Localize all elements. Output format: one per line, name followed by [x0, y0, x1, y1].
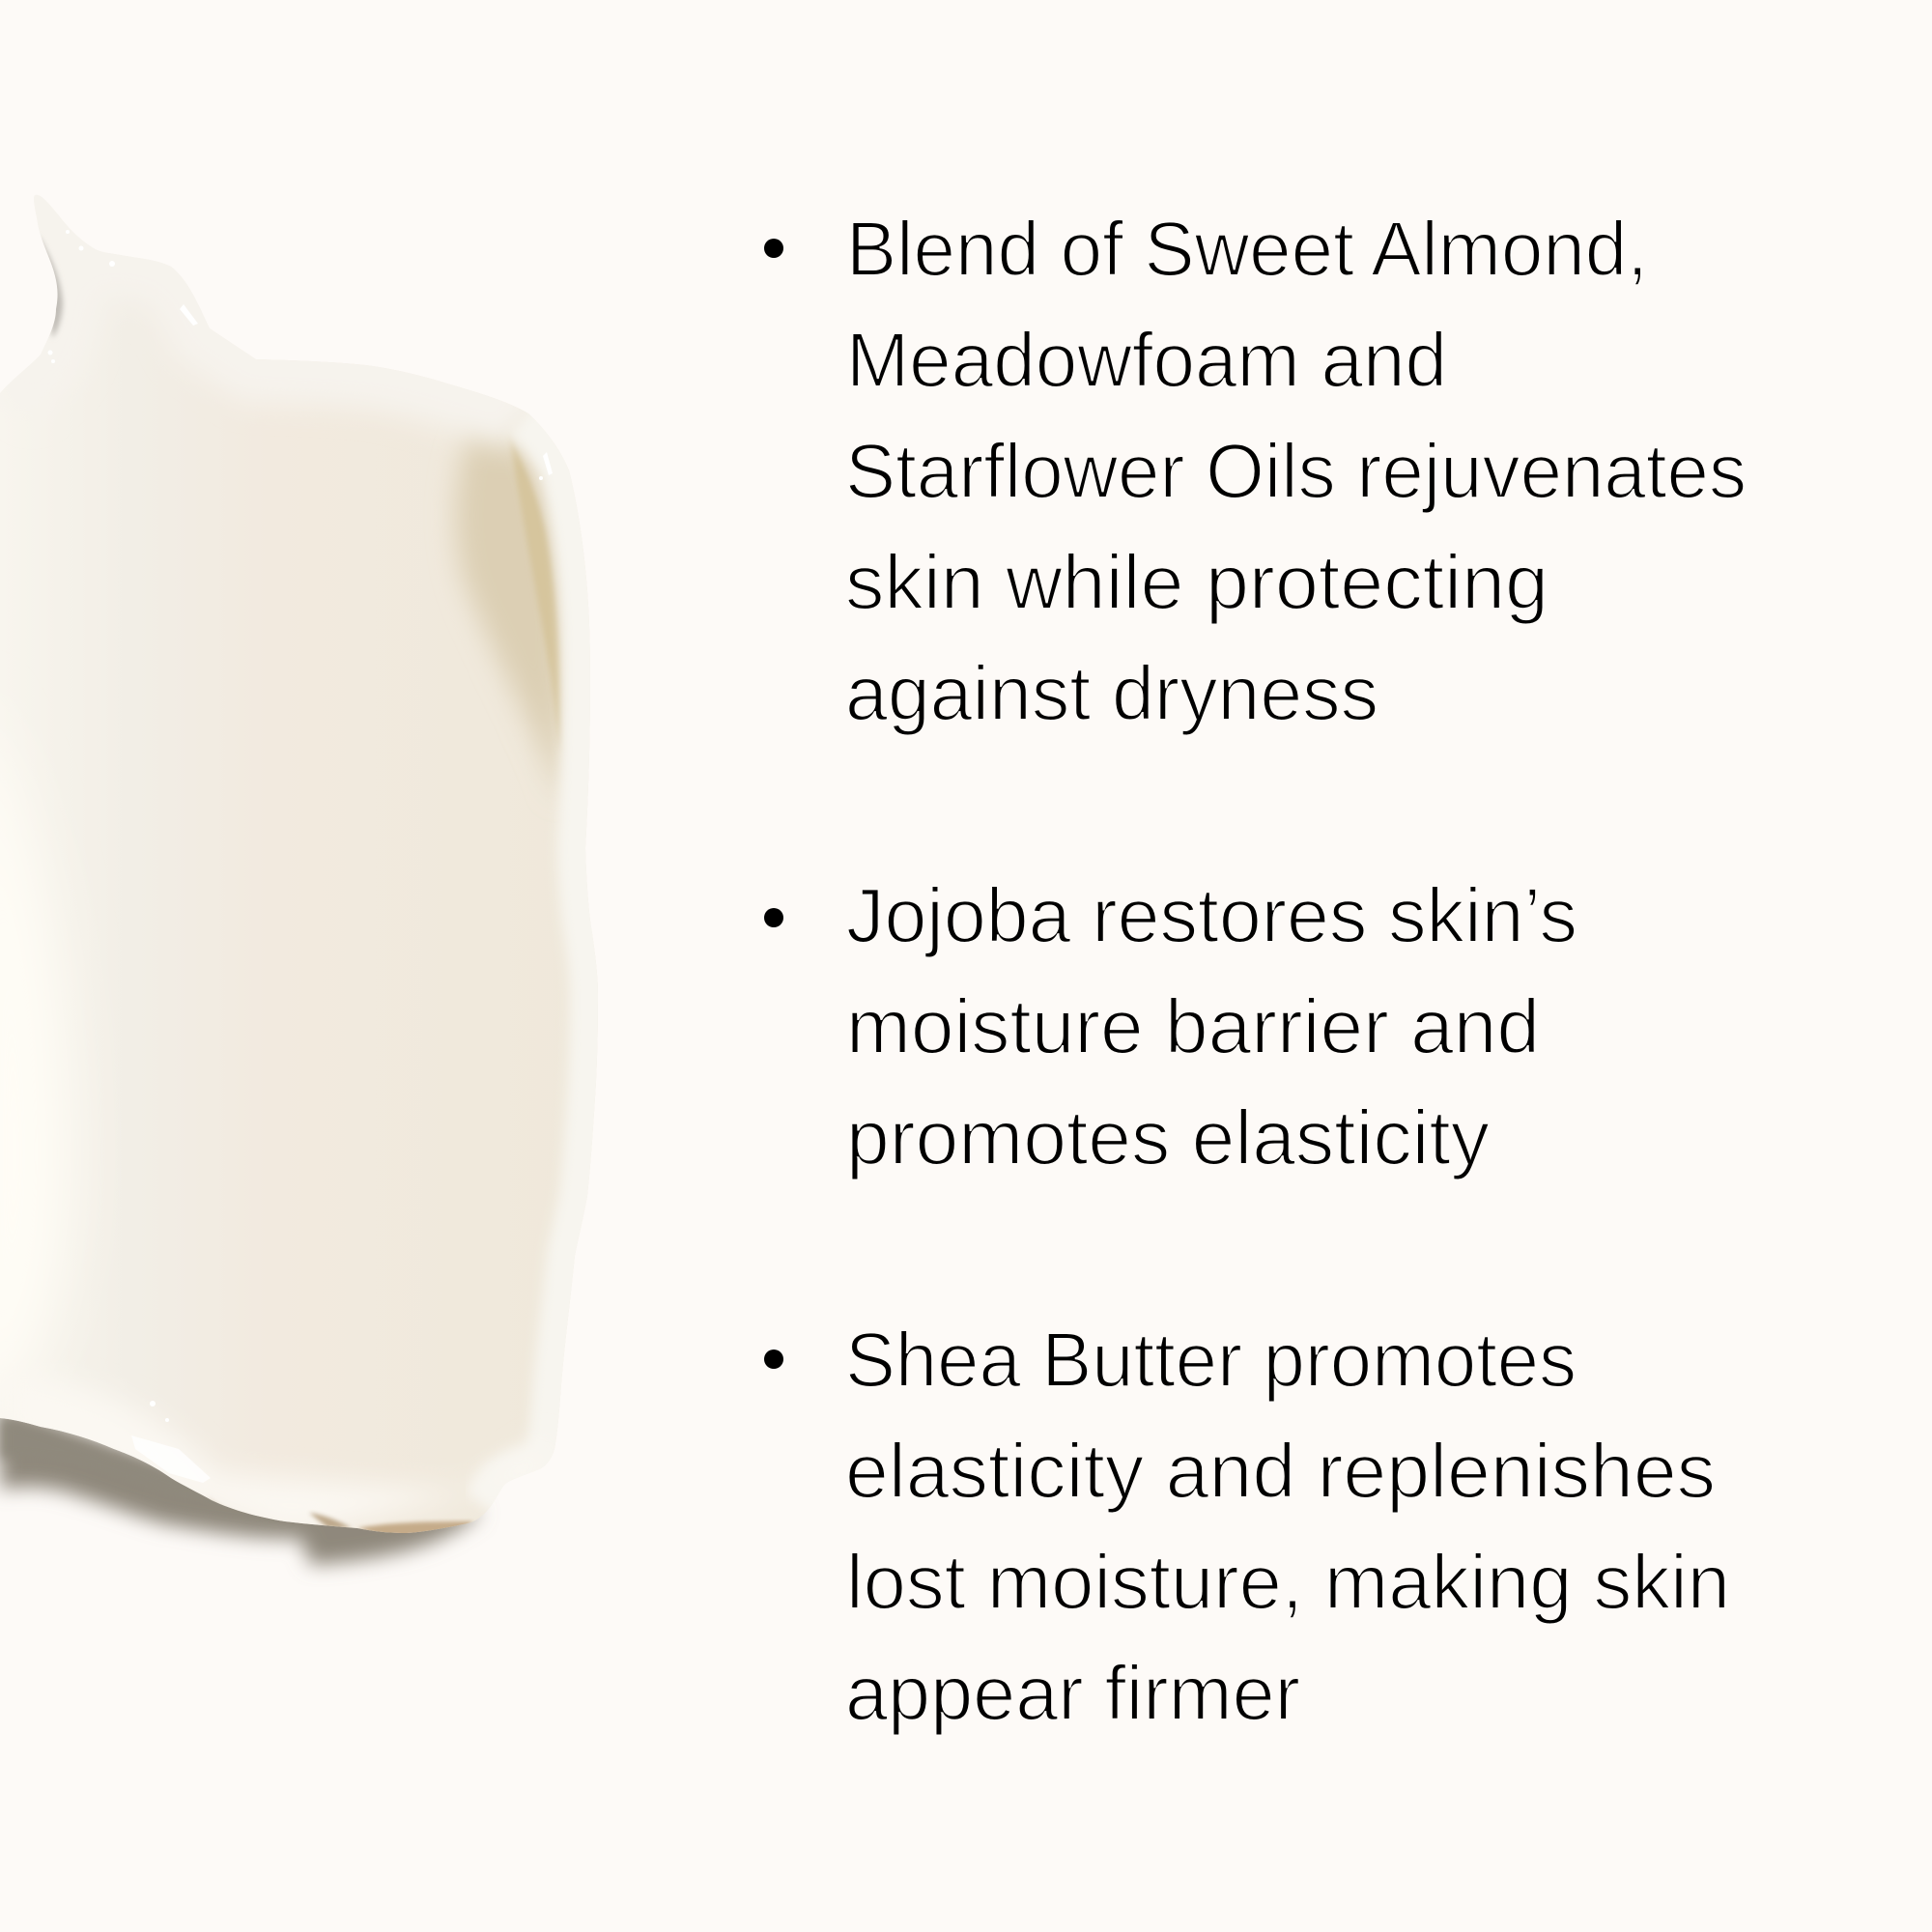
cream swatch [0, 195, 598, 1565]
bullet text: Starflower Oils rejuvenates [845, 428, 1747, 514]
rim along the right edge [488, 413, 598, 1510]
bullet text: promotes elasticity [846, 1094, 1490, 1180]
bullet text [845, 1317, 1730, 1736]
brown underside [357, 1519, 473, 1533]
bullet dot [764, 1350, 783, 1369]
bullet text: Jojoba restores skin’s [846, 872, 1577, 958]
soft rim along the top edge [152, 262, 526, 458]
swatch shading [0, 195, 598, 1538]
tip cavity shade [42, 238, 66, 337]
bullet dot [764, 239, 783, 258]
crescent dark seam [508, 432, 561, 753]
bullet text: lost moisture, making skin [846, 1539, 1730, 1625]
swatch body [0, 195, 598, 1533]
bullet text: moisture barrier and [846, 983, 1540, 1069]
bullet text: appear firmer [845, 1650, 1300, 1736]
bullet text [846, 872, 1577, 1180]
bullet text: Meadowfoam and [846, 317, 1447, 403]
bottom pale lip [2, 1401, 429, 1528]
bullet text: Blend of Sweet Almond, [846, 206, 1648, 292]
bullet dot [764, 908, 783, 927]
infographic canvas [0, 195, 1743, 1735]
bullet text: Shea Butter promotes [845, 1317, 1577, 1403]
bullet text [845, 206, 1747, 736]
warm inner crescent glow [456, 411, 563, 802]
bullet text: elasticity and replenishes [845, 1428, 1716, 1514]
swatch cast shadow [0, 1406, 483, 1565]
bullet block: shea butter [764, 1317, 1730, 1736]
bullet block: oils blend [764, 206, 1747, 736]
bullet text: skin while protecting [845, 539, 1548, 625]
left glow [0, 919, 53, 1312]
glossy highlights [48, 230, 553, 1483]
bullet block: jojoba [764, 872, 1577, 1180]
bullet text: against dryness [845, 650, 1378, 736]
